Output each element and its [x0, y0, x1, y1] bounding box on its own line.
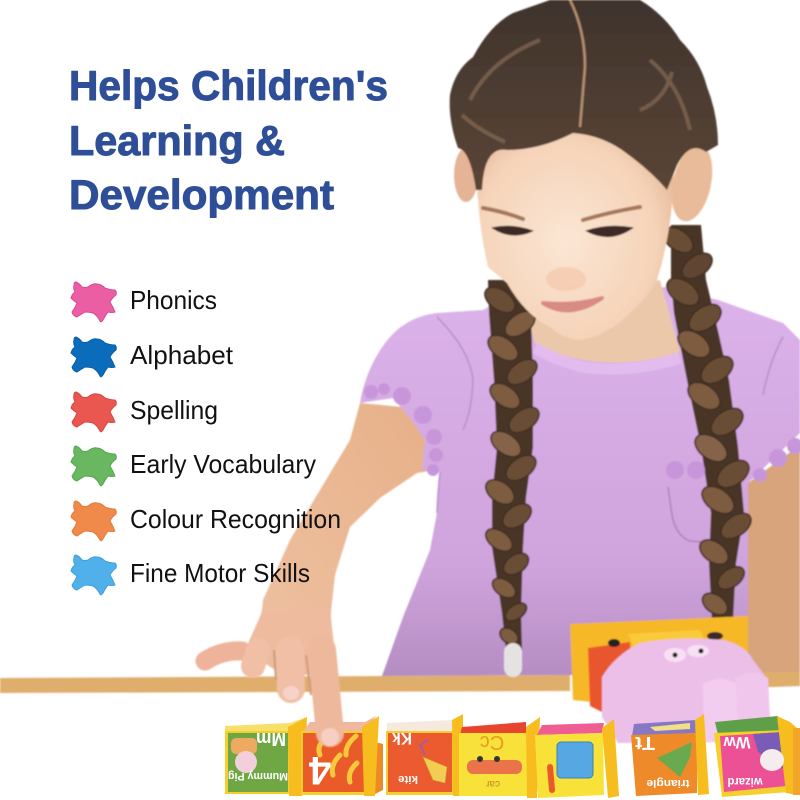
block 5: blue square — [535, 719, 619, 798]
item: Alphabet: Alphabet — [130, 340, 234, 370]
lace trim — [364, 383, 800, 482]
toy: pink elephant — [602, 639, 770, 743]
item: Phonics — [71, 282, 217, 322]
neck — [525, 280, 680, 363]
item: Fine Motor Skills — [71, 555, 310, 595]
block 4: Cc car: car — [485, 778, 500, 789]
item: Spelling — [71, 392, 218, 432]
right braid — [658, 222, 756, 620]
block 4: Cc car: Cc — [480, 731, 504, 753]
item: Fine Motor Skills: Fine Motor Skills — [130, 558, 310, 588]
item: Phonics: Phonics — [130, 285, 217, 315]
far arm — [748, 445, 800, 672]
shirt collar — [535, 348, 680, 369]
block 8: edge of next block — [793, 728, 800, 795]
block 3: Kk kite: Kk — [392, 729, 412, 748]
block 2: number 4: 4 — [308, 748, 331, 792]
item: Early Vocabulary — [71, 446, 316, 486]
title: Helps Children's — [69, 62, 388, 109]
block 6: Tt triangle: triangle — [646, 777, 690, 789]
block 3: Kk kite: kite — [398, 773, 418, 785]
item: Colour Recognition: Colour Recognition — [130, 504, 341, 534]
smile — [543, 298, 602, 310]
block 2: number 4 — [301, 716, 383, 796]
left braid — [480, 280, 544, 668]
hair highlights — [462, 40, 690, 142]
item: Alphabet — [71, 337, 234, 377]
eyebrows and eyes — [483, 207, 640, 236]
hand pointing at block — [205, 610, 339, 746]
hair — [450, 0, 718, 190]
block 1: Mm: Mummy Pig — [228, 770, 288, 782]
item: Early Vocabulary: Early Vocabulary — [130, 449, 316, 479]
nose — [546, 267, 586, 291]
hair part — [570, 0, 585, 127]
wooden table edge — [0, 672, 800, 693]
title: Development — [69, 171, 334, 218]
block 7: Ww wizard: Ww — [723, 733, 750, 752]
block 1: Mm: Mm — [256, 729, 286, 749]
block 3: Kk kite — [386, 714, 463, 796]
block 6: Tt triangle — [631, 714, 709, 796]
toy: yellow frame — [570, 616, 748, 712]
title: Learning & — [69, 117, 285, 164]
ears — [454, 141, 719, 225]
list: learning skills — [71, 282, 341, 595]
block 7: Ww wizard — [714, 716, 797, 797]
block 1: Mm — [225, 717, 307, 796]
block 4: Cc car — [459, 717, 540, 798]
title — [69, 62, 388, 218]
item: Spelling: Spelling — [130, 395, 218, 425]
block 6: Tt triangle: Tt — [635, 733, 655, 753]
face — [476, 120, 675, 340]
item: Colour Recognition — [71, 501, 341, 541]
block 7: Ww wizard: wizard — [728, 775, 763, 789]
near upper arm — [258, 403, 435, 650]
shirt — [360, 287, 800, 676]
